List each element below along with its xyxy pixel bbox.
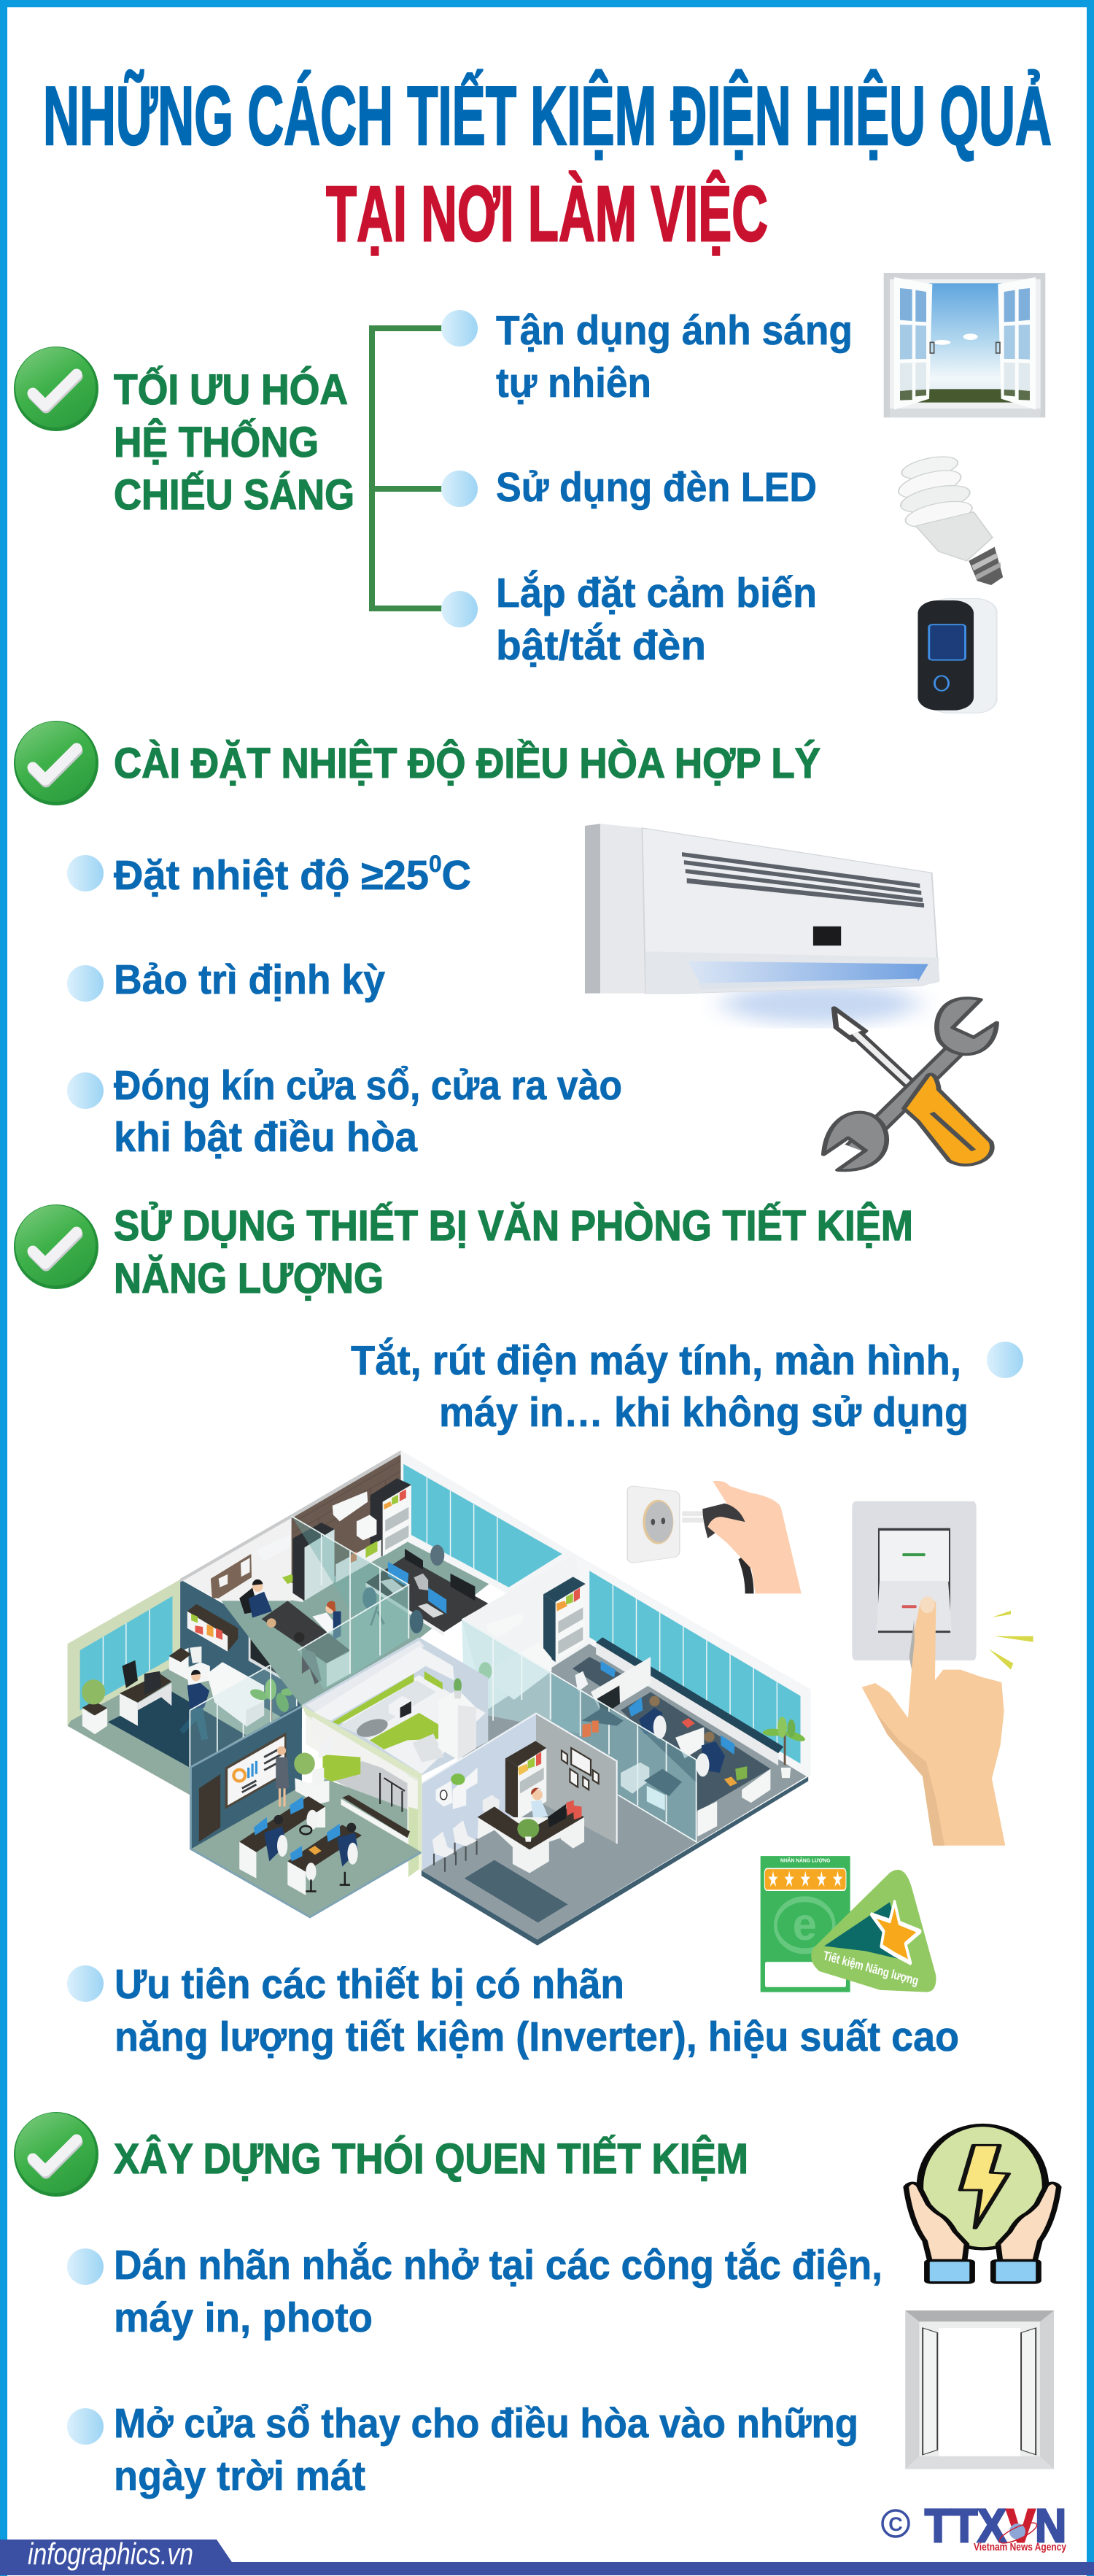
text: open windows: Mở cửa sổ thay cho điều hòa vào những (114, 2400, 858, 2447)
text: unplug devices (351, 1337, 969, 1436)
heading: AC temperature: CÀI ĐẶT NHIỆT ĐỘ ĐIỀU HÒA HỢP LÝ (114, 740, 820, 787)
AC (486, 1612, 523, 1639)
bullet (441, 471, 478, 507)
text: natural light: tự nhiên (496, 360, 651, 406)
workstations (573, 1657, 624, 1690)
plant + cabinet (295, 1778, 329, 1804)
text: sensor: bật/tắt đèn (496, 622, 706, 669)
bookcase (543, 1577, 586, 1602)
text: sensor (496, 569, 817, 669)
icon: hand unplugging socket (627, 1481, 802, 1593)
coffee machine (483, 1795, 500, 1816)
text: close windows (114, 1062, 622, 1161)
receptionist (531, 1800, 548, 1819)
logo: TTXVN: C (888, 2513, 903, 2535)
energy card: e (793, 1898, 817, 1949)
text: labels: máy in, photo (114, 2294, 373, 2341)
text: open windows: ngày trời mát (114, 2453, 365, 2499)
bullet (441, 591, 478, 627)
sofa (494, 1642, 551, 1700)
meeting room (190, 1782, 422, 1917)
text: energy-saving devices: năng lượng tiết kiệm (Inverter), hiệu suất cao (115, 2014, 959, 2060)
icon: tools (823, 998, 997, 1170)
rug (465, 1860, 568, 1922)
text: open windows (114, 2400, 858, 2499)
logo: TTXVN: Vietnam News Agency (974, 2541, 1067, 2553)
text: labels: Dán nhãn nhắc nhở tại các công tắc điện, (114, 2241, 882, 2289)
desks (239, 1796, 325, 1852)
heading: lighting: TỐI ƯU HÓA (114, 366, 348, 414)
kitchen front wall (302, 1705, 422, 1852)
text: energy-saving devices: Ưu tiên các thiết bị có nhãn (115, 1961, 624, 2008)
plant behind (478, 1662, 492, 1680)
heading: lighting: HỆ THỐNG (114, 419, 319, 466)
reception desk (478, 1817, 584, 1873)
icon: window (884, 273, 1045, 417)
bracket connector (372, 328, 443, 608)
illustration: isometric office (67, 1450, 811, 1946)
reception walls (422, 1714, 536, 1871)
potted palm (782, 1733, 788, 1765)
left room (67, 1660, 303, 1795)
presenter (276, 1757, 289, 1788)
heading: habits: XÂY DỰNG THÓI QUEN TIẾT KIỆM (114, 2135, 748, 2183)
pictures (571, 1748, 591, 1776)
glass partition (462, 1619, 581, 1733)
logo: TTXVN: TTXVN (925, 2499, 1066, 2552)
icon: check 4 (14, 2112, 98, 2197)
wall shelf and clock (435, 1781, 453, 1806)
chairs (432, 1831, 457, 1857)
heading: office devices: SỬ DỤNG THIẾT BỊ VĂN PHÒNG TIẾT KIỆM (114, 1202, 913, 1250)
man on phone (187, 1683, 209, 1709)
title (43, 70, 1052, 258)
top room (221, 1531, 491, 1706)
bullet (67, 2408, 104, 2445)
text: close windows: Đóng kín cửa sổ, cửa ra vào (114, 1062, 622, 1109)
icon: open door frame (905, 2310, 1054, 2469)
bullet (987, 1342, 1023, 1378)
text: natural light (496, 307, 853, 406)
big desk (365, 1557, 488, 1632)
icon: air conditioner (585, 824, 939, 1024)
panel: section 2 air conditioning (14, 721, 997, 1170)
text: LED: Sử dụng đèn LED (496, 464, 817, 511)
bullet (67, 965, 104, 1002)
glass of left room (190, 1650, 297, 1768)
icon: check 1 (14, 347, 98, 431)
title: TẠI NƠI LÀM VIỆC (326, 169, 768, 258)
text: labels (114, 2241, 882, 2341)
bullet (67, 1072, 104, 1109)
icon: motion sensor (918, 598, 997, 713)
panel: section 4 habits (14, 2112, 1059, 2499)
text: temperature: C (442, 852, 471, 899)
footer bar (0, 2537, 1094, 2575)
text: close windows: khi bật điều hòa (114, 1114, 418, 1161)
text: sensor: Lắp đặt cảm biến (496, 569, 817, 616)
bullet (441, 310, 478, 347)
text: site name: infographics.vn (28, 2537, 193, 2571)
heading: office devices (114, 1202, 913, 1302)
heading: office devices: NĂNG LƯỢNG (114, 1255, 384, 1302)
right block floor (422, 1637, 808, 1940)
panel: section 1 lighting (14, 273, 1045, 713)
kitchen (302, 1637, 488, 1776)
text: natural light: Tận dụng ánh sáng (496, 307, 853, 354)
saving badge: Tiết kiệm Năng lượng (823, 1949, 919, 1989)
text: unplug devices: Tắt, rút điện máy tính, màn hình, (351, 1337, 961, 1384)
energy card (761, 1856, 850, 1992)
bullet (67, 855, 104, 891)
icon: check 3 (14, 1204, 98, 1289)
text: energy-saving devices (115, 1961, 959, 2060)
text: temperature: 0 (429, 851, 442, 877)
text: maintenance: Bảo trì định kỳ (114, 956, 385, 1003)
bullet (67, 1965, 104, 2002)
energy card: NHÃN NĂNG LƯỢNG (780, 1858, 831, 1864)
bullet (67, 2248, 104, 2285)
palm (268, 1695, 274, 1721)
front glass top room (292, 1516, 408, 1674)
icon: hands holding energy (906, 2125, 1059, 2283)
icon: light bulb (893, 452, 1003, 585)
energy card: ★★★★★ (768, 1869, 842, 1890)
icon: energy labels (761, 1856, 936, 1992)
heading: lighting (114, 366, 354, 519)
text: unplug devices: máy in… khi không sử dụng (439, 1389, 969, 1436)
text: temperature: Đặt nhiệt độ ≥25 (114, 852, 435, 899)
meeting desk (262, 1601, 350, 1663)
icon: hand pressing switch (852, 1501, 1033, 1846)
saving badge (811, 1870, 936, 1992)
panel: section 3 office equipment (14, 1202, 1033, 2060)
heading: lighting: CHIẾU SÁNG (114, 471, 354, 519)
reception bookcase (505, 1741, 546, 1766)
icon: check 2 (14, 721, 98, 805)
